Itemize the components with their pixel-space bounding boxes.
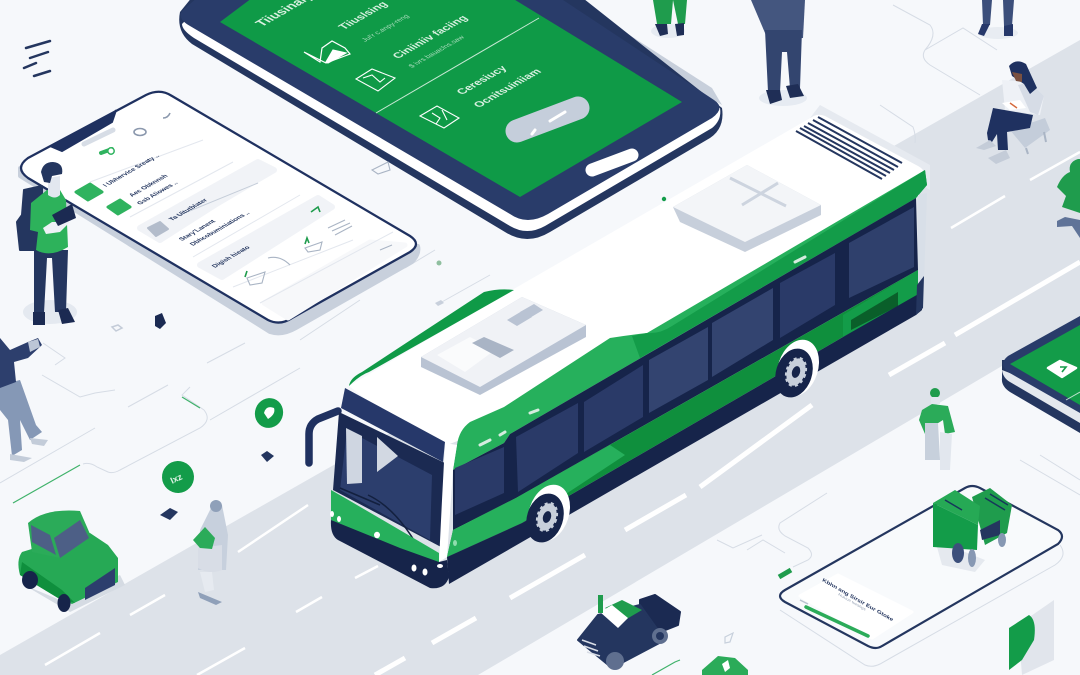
list text 3: Ceresiucy [454, 64, 511, 97]
grille lines [582, 640, 600, 656]
truck bed [640, 595, 680, 640]
small phone screen [21, 92, 416, 323]
chip icon [1048, 361, 1076, 377]
small icons [112, 260, 444, 331]
small line icons [247, 162, 392, 285]
windshield [333, 412, 449, 547]
truck body [578, 605, 665, 668]
jacket [0, 338, 42, 388]
small phone text: Gsb Aliowes .. [136, 180, 180, 206]
front bumper [331, 520, 449, 588]
rear grille [851, 292, 898, 330]
action pill [517, 108, 578, 134]
small phone text: Stary'Lanent [178, 219, 218, 242]
icon: ramp [304, 41, 350, 63]
small phone [20, 92, 418, 333]
legs [34, 250, 68, 313]
seated woman [976, 61, 1050, 164]
icon: navy tag [155, 313, 166, 329]
car body [18, 533, 118, 604]
icon: gray chip [148, 222, 168, 236]
green car [18, 510, 125, 612]
card [800, 575, 912, 638]
wheels [22, 571, 38, 589]
stool [1010, 118, 1050, 148]
speaker pill [84, 130, 113, 144]
right tablet [1002, 316, 1080, 433]
roof units [421, 297, 586, 395]
small phone text: Digish hieato [211, 245, 252, 269]
green pin left: Ixz [169, 471, 184, 486]
mirror [309, 411, 338, 463]
green pin left [157, 456, 199, 520]
shirt [30, 190, 68, 253]
shoes [33, 308, 75, 325]
list text 1 [336, 0, 411, 43]
screen [220, 0, 682, 197]
hands and paper [1002, 100, 1026, 110]
visor [341, 388, 445, 462]
panel: bottom card [264, 242, 405, 318]
vent stripes [796, 117, 902, 179]
front pillar [439, 443, 457, 562]
person with backpack [17, 162, 77, 325]
panel: lower card [200, 198, 332, 277]
head [48, 176, 60, 198]
person top center [751, 0, 807, 106]
small phone text: I Ubhervice Sreaty .. [102, 153, 162, 188]
rear post [918, 193, 927, 286]
bottom right tablet: Nuiuue tueshgs [838, 592, 866, 611]
green chip [779, 570, 791, 577]
windows band [453, 198, 918, 530]
green bus model [933, 488, 1012, 572]
phone face [181, 0, 720, 220]
car roof [28, 510, 90, 558]
lower body green [447, 270, 918, 557]
tablet body [780, 486, 1062, 648]
icon: square glyph 2 [420, 106, 459, 128]
person beside road right [919, 388, 955, 470]
progress bar [806, 607, 868, 636]
person far right green [1057, 159, 1080, 238]
cab roof [605, 600, 642, 620]
card text: Kbhn ang Sirsir Eur Gtoke [821, 578, 895, 623]
person standing left [0, 338, 48, 462]
panel: upper card [140, 162, 274, 240]
skirt [447, 292, 922, 584]
woman with green bag [193, 500, 228, 605]
large phone [179, 0, 722, 239]
small phone depth [20, 168, 418, 333]
roof green stripe [349, 289, 514, 386]
window panes [455, 207, 914, 515]
small phone text: Dbhcobuminiations .. [189, 210, 252, 247]
list text 3: Ocnitsuiniiam [471, 67, 545, 110]
phone body depth [179, 0, 722, 239]
headlights [330, 511, 457, 576]
screen divider [376, 18, 539, 113]
bottom right tablet [780, 486, 1062, 648]
rooftop unit front [421, 297, 586, 395]
backpack [17, 186, 42, 250]
truck [578, 595, 680, 670]
list text 1: Jul'r c.anpy-reng [361, 14, 411, 43]
rooftop unit rear [673, 165, 821, 252]
grille [85, 568, 115, 600]
dot on road edge [662, 197, 666, 201]
bus [309, 105, 930, 588]
hair and face [1009, 61, 1037, 94]
icon: square glyph 1 [356, 69, 395, 91]
notch [50, 110, 116, 151]
green pin right [251, 394, 287, 462]
shoes [976, 140, 1010, 164]
person top right legs [978, 0, 1018, 39]
outlined chip bottom [725, 633, 733, 643]
small phone text: Ta Uitutblater [168, 198, 210, 222]
front wheel [520, 479, 577, 547]
car windows [31, 525, 56, 555]
top icons [134, 113, 170, 136]
legs [987, 108, 1033, 150]
green tag bottom right [1009, 600, 1054, 675]
bus shadow [810, 105, 930, 190]
list text 1: Tiiuslsing [336, 0, 391, 32]
green bag [193, 527, 215, 549]
phone shadow edge [545, 0, 722, 105]
torso [1002, 80, 1044, 115]
jeans [0, 380, 42, 456]
green ticks [245, 207, 320, 277]
roof [349, 115, 925, 445]
small phone text [102, 153, 252, 269]
list text 2: $ ivrs.bauaclns.saw [408, 35, 467, 69]
arm and tablet [43, 222, 70, 234]
front green panel [331, 490, 439, 570]
icon: green chips [76, 148, 130, 214]
body [198, 500, 228, 570]
side lamps [480, 257, 805, 445]
car shadow [24, 575, 125, 612]
home button [592, 155, 632, 170]
small phone text: Aec Obknnsh [128, 174, 170, 198]
legs [200, 572, 214, 592]
green connector bottom [652, 660, 680, 675]
top-left dashes icon [24, 41, 50, 76]
dividers [90, 140, 393, 303]
rear wheel [769, 334, 826, 402]
list text 2: Ciniiniiv faciing [390, 14, 471, 61]
wheels [606, 652, 624, 670]
green bag bottom [702, 656, 748, 675]
person top green [651, 0, 687, 38]
body side top band [453, 170, 927, 470]
